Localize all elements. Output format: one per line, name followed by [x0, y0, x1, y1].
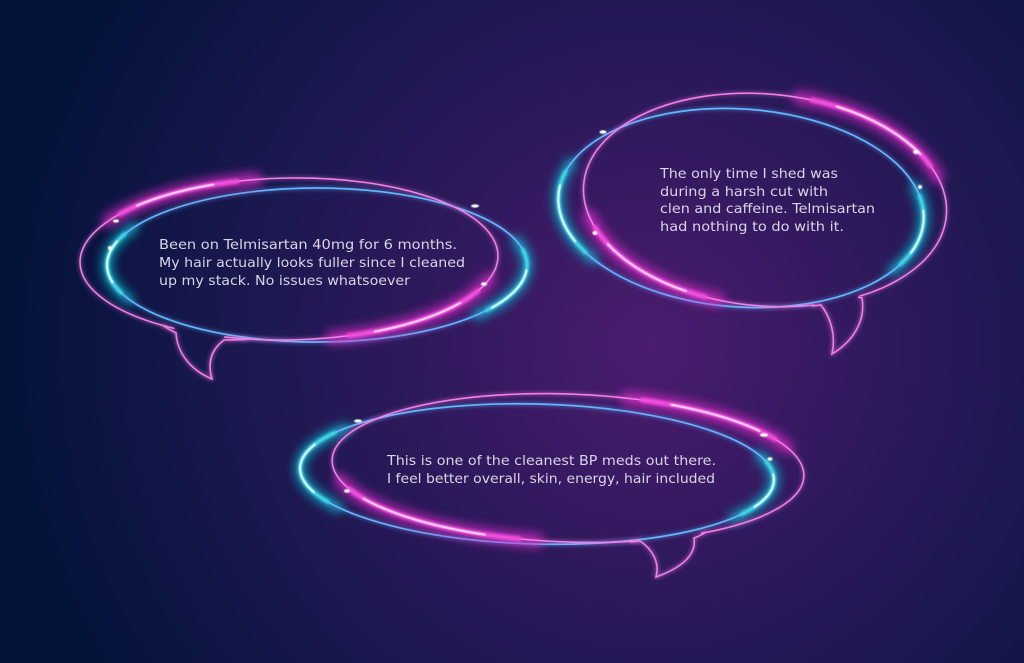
quote text: I feel better overall, skin, energy, hair included: [387, 472, 715, 487]
speech bubble: only time I shed: [552, 79, 956, 354]
quote text: Been on Telmisartan 40mg for 6 months.: [159, 238, 457, 253]
quote text: [386, 454, 716, 487]
quote text: This is one of the cleanest BP meds out there.: [386, 454, 716, 469]
blue neon ellipse: [552, 96, 930, 320]
blue neon ellipse: [298, 398, 776, 550]
quote text: [659, 167, 875, 235]
quote text: up my stack. No issues whatsoever: [159, 274, 411, 289]
sparkles: [108, 204, 487, 286]
quote text: had nothing to do with it.: [660, 220, 844, 235]
pink neon outline with tail: [330, 386, 806, 577]
speech bubble: cleanest BP meds: [298, 386, 806, 577]
speech bubble: Telmisartan 40mg: [79, 174, 527, 379]
sparkles: [592, 130, 922, 235]
quote text: during a harsh cut with: [660, 185, 828, 200]
pink neon outline with tail: [574, 79, 956, 354]
blue neon ellipse: [107, 188, 527, 342]
quote text: [159, 238, 465, 289]
quote text: clen and caffeine. Telmisartan: [660, 202, 875, 217]
quote text: The only time I shed was: [659, 167, 838, 182]
sparkles: [344, 419, 772, 493]
quote text: My hair actually looks fuller since I cleaned: [159, 256, 465, 271]
pink neon outline with tail: [79, 174, 499, 379]
